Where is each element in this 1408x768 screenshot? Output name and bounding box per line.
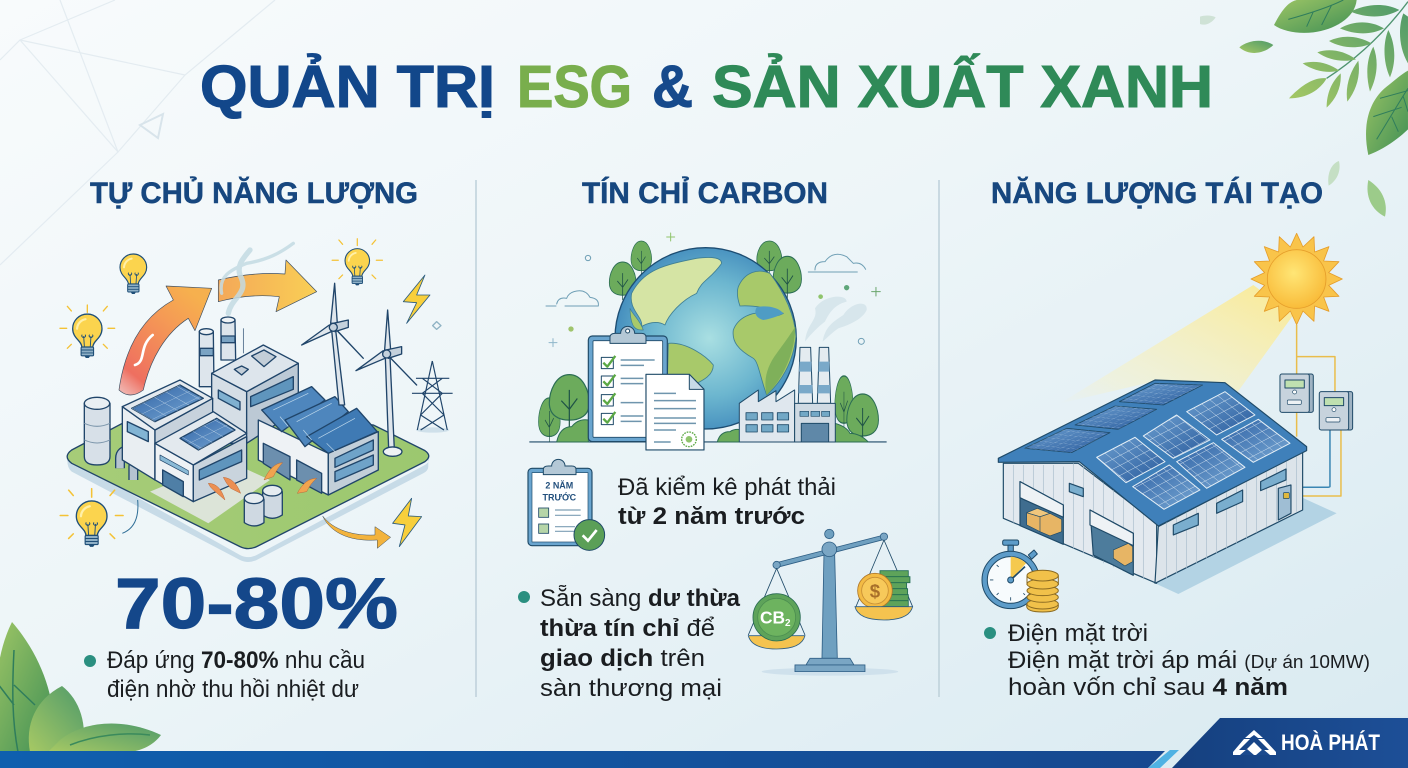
building: tall block xyxy=(212,345,298,443)
icon: light bulb 1 xyxy=(120,254,147,294)
solar panels: right slope xyxy=(1097,392,1290,509)
text: solar payback: Điện mặt trời xyxy=(1008,620,1148,647)
title: ESG xyxy=(517,54,632,120)
heading: energy self-sufficiency: TỰ CHỦ NĂNG LƯỢNG xyxy=(90,176,418,210)
heading: carbon credits: TÍN CHỈ CARBON xyxy=(582,176,828,210)
text: solar payback xyxy=(1008,620,1370,701)
arrow: recovered energy xyxy=(218,260,317,312)
small orange arrows xyxy=(208,463,317,500)
text: solar payback: hoàn vốn chỉ sau 4 năm xyxy=(1008,674,1288,701)
icon: trees foreground right xyxy=(717,376,878,442)
icon: trees foreground left xyxy=(538,375,589,442)
icon: sun xyxy=(1251,233,1342,325)
leaves: top right xyxy=(1200,0,1408,217)
building: left block with solar roof xyxy=(122,380,213,480)
building: right hall with sawtooth solar roof xyxy=(258,387,378,495)
icon: balance scale: CB xyxy=(760,607,785,627)
decorative line art top left xyxy=(0,0,275,265)
text: inventory: từ 2 năm trước xyxy=(618,503,805,530)
panel: carbon credits xyxy=(518,176,913,702)
icon: balance scale xyxy=(748,529,913,676)
icon: small tanks xyxy=(244,485,282,526)
icon: small clipboard with check: TRƯỚC xyxy=(543,492,577,503)
icon: power pylon xyxy=(412,361,453,433)
icon: lightning 2 xyxy=(393,498,422,547)
divider lines xyxy=(476,180,939,697)
roof xyxy=(998,380,1307,526)
icon: electric meter 2 xyxy=(1319,392,1353,430)
platform xyxy=(67,397,429,562)
icon: small clipboard with check xyxy=(528,459,605,550)
footer bar xyxy=(0,717,1408,768)
icon: factory xyxy=(739,347,835,442)
arrow: bottom energy xyxy=(323,516,391,548)
wires xyxy=(1292,325,1341,496)
text: surplus credits xyxy=(540,584,741,702)
title: QUẢN TRỊ xyxy=(200,53,495,120)
leaves: bottom left xyxy=(0,622,161,752)
icon: wind turbine 2 xyxy=(356,310,417,456)
icon: lightning 1 xyxy=(403,275,430,323)
sparkle xyxy=(433,322,441,329)
smoke xyxy=(221,243,293,313)
icon: clipboard checklist xyxy=(588,326,667,442)
icon: storage tank xyxy=(84,397,110,465)
icon: document xyxy=(646,374,704,450)
warehouse xyxy=(1003,452,1303,583)
icon: chimneys xyxy=(199,317,243,387)
illustration: globe with checklist and factory xyxy=(529,233,887,450)
clouds and sparkles xyxy=(546,233,880,347)
text: solar payback: Điện mặt trời áp mái (Dự án 10MW) xyxy=(1008,647,1370,674)
solar panels: left slope xyxy=(1025,383,1203,453)
bullet dot xyxy=(984,627,996,639)
icon: light bulb 4 xyxy=(60,489,123,547)
bullet dot xyxy=(518,591,530,603)
big number: 70-80% xyxy=(115,565,398,644)
logo: Hoa Phat: HOÀ PHÁT xyxy=(1281,730,1380,755)
icon: globe xyxy=(615,248,796,429)
icon: pipes xyxy=(120,450,144,480)
text: surplus credits: Sẵn sàng dư thừa xyxy=(540,584,741,612)
icon: light bulb 3 xyxy=(332,239,382,285)
panel: renewable energy xyxy=(982,176,1370,701)
illustration: factory with waste heat recovery xyxy=(60,239,453,562)
icon: balance scale: 2 xyxy=(785,618,791,629)
icon: balance scale: $ xyxy=(870,580,881,601)
panel grid xyxy=(1025,383,1290,509)
text: surplus credits: giao dịch trên xyxy=(540,645,705,672)
text: energy description: Đáp ứng 70-80% nhu cầu xyxy=(107,647,365,674)
building: lower block with solar roof xyxy=(155,412,247,502)
building shadow xyxy=(1155,497,1337,594)
icon: trees behind globe xyxy=(609,241,801,300)
text: inventory: Đã kiểm kê phát thải xyxy=(618,474,836,501)
illustration: solar warehouse xyxy=(982,233,1353,612)
icon: light bulb 2 xyxy=(60,305,115,358)
icon: heat squiggle xyxy=(135,335,153,365)
arrow: waste heat rising xyxy=(119,286,212,395)
text: energy description xyxy=(107,647,365,703)
logo: Hoa Phat xyxy=(1233,730,1380,755)
smoke xyxy=(805,297,867,342)
text: energy description: điện nhờ thu hồi nhiệt dư xyxy=(107,676,359,703)
title: & xyxy=(652,54,693,120)
icon: small clipboard with check: 2 NĂM xyxy=(545,481,573,491)
sun beam xyxy=(1060,285,1293,403)
text: inventory xyxy=(618,474,836,530)
connector line xyxy=(122,500,138,533)
title: SẢN XUẤT XANH xyxy=(712,53,1213,120)
text: surplus credits: sàn thương mại xyxy=(540,675,722,702)
icon: wind turbine 1 xyxy=(302,283,363,405)
icon: stopwatch xyxy=(982,540,1039,609)
panel: energy self-sufficiency xyxy=(60,176,453,703)
text: surplus credits: thừa tín chỉ để xyxy=(540,615,715,642)
ground line xyxy=(529,440,887,444)
icon: electric meter 1 xyxy=(1280,374,1313,412)
icon: coin stack xyxy=(1027,570,1058,612)
bullet dot xyxy=(84,655,96,667)
heading: renewable energy: NĂNG LƯỢNG TÁI TẠO xyxy=(991,176,1323,210)
title xyxy=(200,53,1213,120)
